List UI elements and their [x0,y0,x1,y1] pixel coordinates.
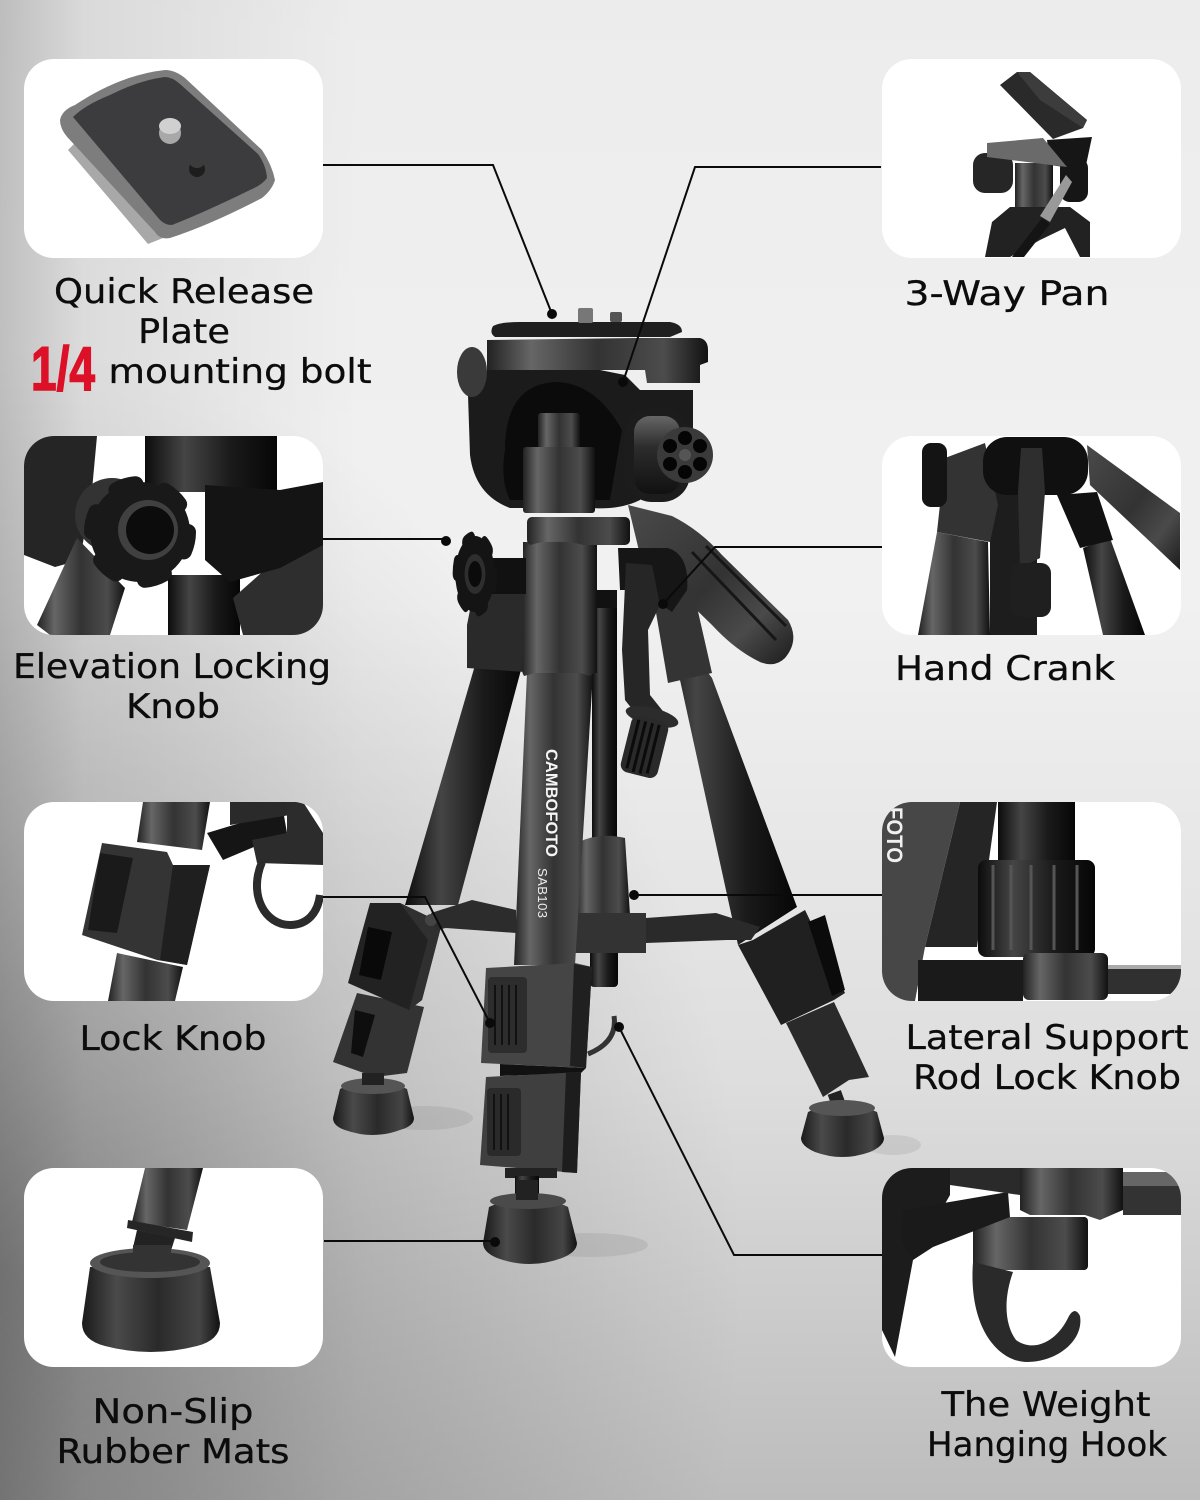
right clamp upper [738,910,845,1025]
crown [522,517,630,676]
centre clamps [480,963,592,1200]
foot shadows [377,1106,921,1257]
centre foot [483,1180,577,1264]
right leg [653,585,869,1112]
brand text: CAMBOFOTO [542,749,561,857]
label: rubber mats [56,1392,290,1472]
label: weight hook [927,1385,1167,1465]
rear rod and lower collar [575,600,630,987]
label: lateral support rod lock knob: Rod Lock Knob [913,1058,1181,1098]
panning handle [628,505,793,664]
tripod head [457,308,708,513]
icon: pan head [973,72,1092,257]
panel: rubber mat [24,1168,323,1367]
label: rubber mats: Rubber Mats [56,1432,290,1472]
label: weight hook: Hanging Hook [927,1425,1167,1465]
label: quick release plate: Quick Release [54,272,314,312]
icon: plate [60,70,275,244]
pan knob [624,408,713,502]
tripod [333,308,921,1264]
label: lateral support rod lock knob: Lateral Support [906,1018,1188,1058]
brand text [535,749,561,918]
left foot [333,1073,414,1135]
left clamp lower [333,993,424,1077]
label: hand crank: Hand Crank [895,649,1115,689]
icon: rubber foot [82,1168,220,1352]
right clamp lower [786,1002,869,1097]
icon: rod knob: FOTO [882,807,907,863]
icon: crank [918,437,1180,635]
left leg [333,560,525,1077]
label: quick release plate: mounting bolt [108,352,372,392]
icon: lock [82,802,323,1001]
label: lock knob: Lock Knob [80,1019,266,1059]
upper clamp [481,963,592,1068]
badge: 1/4: 1/4 [31,335,95,404]
column top [538,413,580,449]
plate [491,322,682,337]
lateral support rods [425,900,760,953]
icon: locking knob [24,436,323,635]
elevation knob [455,536,526,612]
panel: quick release plate [24,59,323,258]
panel: hand crank [882,436,1181,635]
lower clamp [480,1072,581,1173]
icon: hook [882,1168,1181,1362]
centre column [514,542,597,965]
label: weight hook: The Weight [940,1385,1150,1425]
icon: rod knob [882,802,1181,1001]
label: quick release plate [31,272,372,404]
panel: lateral support rod lock knob [882,802,1181,1001]
label: elevation locking knob [13,647,331,727]
label: lateral support rod lock knob [906,1018,1188,1098]
right foot [801,1100,884,1157]
label: elevation locking knob: Elevation Locking [13,647,331,687]
label: 3-way pan: 3-Way Pan [904,274,1110,314]
quick release seat [487,338,708,383]
panel: 3-way pan [882,59,1181,258]
label: elevation locking knob: Knob [126,687,220,727]
label: quick release plate: Plate [138,312,230,352]
left ball [457,347,487,397]
panel: weight hook [882,1168,1181,1367]
panel: lock knob [24,802,323,1001]
brand text: SAB103 [535,868,550,918]
hand crank [611,548,687,782]
connector lines [322,165,883,1255]
centre hook [588,1016,614,1054]
panel: elevation locking knob [24,436,323,635]
left clamp upper [348,903,442,1010]
label: rubber mats: Non-Slip [92,1392,254,1432]
mount bolts [578,308,593,323]
head body [468,370,693,508]
